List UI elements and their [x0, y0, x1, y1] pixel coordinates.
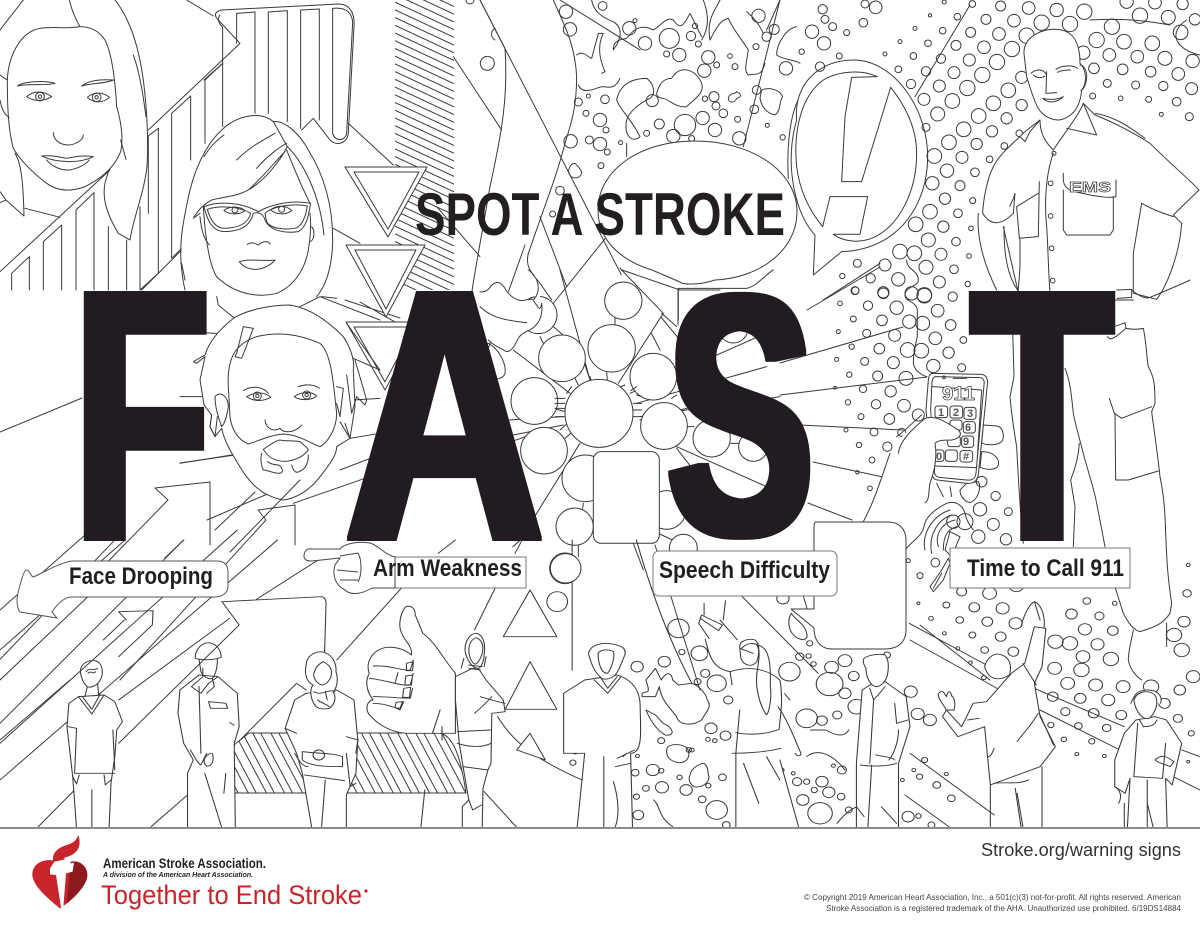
- label: Time to Call 911: Time to Call 911: [967, 555, 1124, 582]
- copyright: © Copyright 2019 American Heart Association, Inc., a 501(c)(3) not-for-profit. All rights reserved. American: [804, 892, 1181, 902]
- big FAST letters: F: [74, 216, 210, 616]
- slogan: Together to End Stroke: [101, 880, 362, 910]
- slogan trademark dot: [364, 889, 368, 893]
- pointing hand fist behind A: [480, 270, 542, 352]
- phone keypad digits: 9: [963, 436, 969, 448]
- man with hand in pocket: [856, 654, 910, 828]
- label: Speech Difficulty: Speech Difficulty: [659, 557, 831, 584]
- footer divider: [0, 827, 1200, 829]
- phone keypad digits: 1: [938, 407, 944, 419]
- woman with glasses portrait: [181, 115, 333, 297]
- label: Time to Call 911: [950, 548, 1130, 588]
- woman portrait top left: [0, 0, 148, 240]
- phone keypad digits: #: [963, 451, 969, 463]
- phone keypad digits: 3: [967, 408, 973, 420]
- association name: American Stroke Association.: [103, 856, 266, 871]
- exclamation speech bubble: [791, 60, 928, 275]
- division line: A division of the American Heart Association.: [102, 870, 253, 879]
- website: Stroke.org/warning signs: [981, 840, 1181, 860]
- triangles top centre: [345, 167, 427, 390]
- big FAST letters: T: [971, 215, 1113, 615]
- worker in hard hat: [178, 643, 239, 828]
- blobs and bubbles top centre: [550, 0, 800, 217]
- big FAST letters: A: [345, 215, 544, 615]
- label: Face Drooping: [17, 561, 228, 618]
- striped panel lower centre: [234, 733, 466, 793]
- speech bubble lower centre: [791, 522, 906, 649]
- person in scrubs: [67, 661, 122, 828]
- copyright: Stroke Association is a registered trademark of the AHA. Unauthorized use prohibited. 6/19DS14884: [826, 903, 1181, 913]
- label: Arm Weakness with pointing hand: Arm Weakness: [373, 555, 522, 582]
- woman with belt: [285, 652, 358, 828]
- man in sweater: [564, 643, 641, 828]
- phone keypad digits: [936, 407, 973, 463]
- copyright: [804, 892, 1181, 913]
- EMS pocket text: EMS: [1069, 179, 1111, 196]
- halftone dots right top: [799, 0, 1200, 302]
- bearded man portrait: [180, 297, 380, 503]
- central figure outline and arm: [437, 0, 577, 300]
- people right group: [564, 601, 1182, 828]
- footer background: [0, 829, 1200, 927]
- man in suit waving: [938, 602, 1055, 827]
- phone keypad digits: 6: [965, 422, 971, 434]
- EMS worker legs: [1010, 280, 1190, 680]
- phone keypad digits: 0: [936, 451, 942, 463]
- thumbs up hand: [367, 606, 455, 827]
- hatched vertical band: [395, 0, 454, 290]
- title: SPOT A STROKE: [415, 181, 785, 248]
- striped arrow top left: [0, 0, 393, 298]
- triangles lower centre: [503, 554, 581, 765]
- woman with crossed arms: [455, 633, 505, 828]
- people left group: [67, 633, 505, 828]
- lower right dots: [631, 540, 1200, 828]
- big FAST letters: S: [667, 224, 814, 608]
- label: Face Drooping: Face Drooping: [69, 563, 213, 590]
- upper arrowheads behind F: [0, 480, 300, 740]
- smartphone and hand calling 911: [863, 373, 1012, 592]
- halftone dots between S and T: [834, 260, 967, 491]
- phone keypad digits: 2: [953, 407, 959, 419]
- big FAST letters: [74, 215, 1113, 616]
- phone screen 911 text: 911: [942, 384, 975, 405]
- EMS worker: [978, 29, 1199, 300]
- lower-left arrows: [0, 530, 589, 827]
- painter with ponytail: [699, 601, 801, 828]
- label: Speech Difficulty: [653, 551, 837, 596]
- woman with backpack: [1115, 690, 1182, 828]
- speech bubble behind title: [598, 141, 797, 340]
- American Heart Association logo: heart and torch: [32, 835, 87, 908]
- centre circle cluster: [481, 270, 780, 584]
- label: Arm Weakness with pointing hand: [304, 542, 526, 594]
